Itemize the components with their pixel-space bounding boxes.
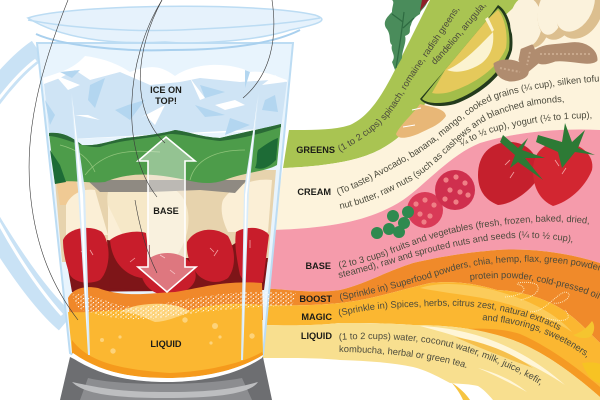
icon: banana slices (510, 0, 600, 48)
highlight: magic band lower orange edge (465, 329, 600, 397)
panel: liquid band (262, 323, 600, 400)
greens text: GREENS (296, 145, 335, 155)
magic text: MAGIC (301, 312, 332, 322)
blender glass jar (37, 43, 293, 380)
blender handle (0, 50, 66, 322)
icon: nut butter dollop (396, 104, 446, 138)
boost text: BOOST (299, 294, 332, 304)
icon: leafy green (385, 0, 429, 70)
cream text: nut butter, raw nuts (such as cashews and blanched almonds, (340, 96, 564, 209)
liquid text: (1 to 2 cups) water, coconut water, milk, juice, kefir, (339, 332, 542, 386)
icon: lemon wedge (573, 321, 600, 383)
banana layer (54, 165, 276, 262)
base text: (2 to 3 cups) fruits and vegetables (fresh, frozen, baked, dried, (339, 214, 589, 270)
icon: peas (371, 206, 414, 239)
greens text: dandelion, arugula, (432, 5, 486, 64)
panel: magic band (262, 282, 600, 397)
liquid text: kombucha, herbal or green tea. (340, 345, 466, 368)
icon: walnuts (495, 44, 596, 80)
base text: BASE (305, 261, 331, 271)
leader lines (29, 0, 274, 320)
glass highlights (71, 92, 259, 360)
panel: cream band (272, 0, 600, 230)
label: base: BASE (153, 206, 179, 216)
greens text: (1 to 2 cups) spinach, romaine, radish greens, (338, 9, 460, 153)
panel: greens band (283, 0, 522, 168)
double arrow (138, 137, 196, 292)
icon: avocado (420, 5, 512, 106)
strawberry layer (63, 228, 269, 296)
highlight: magic band upper glow (420, 284, 572, 332)
cream text: ¼ to ½ cup), yogurt (½ to 1 cup), (459, 111, 592, 146)
spinach layer (49, 124, 281, 184)
icon: raspberries (407, 170, 475, 228)
icon: farm strawberries (478, 123, 595, 206)
liquid bottom shading (72, 340, 263, 378)
boost text: (Sprinkle in) Superfood powders, chia, hemp, flax, green powder, (340, 255, 600, 302)
blender base (60, 353, 272, 400)
liquid layer (68, 304, 263, 378)
greens text (296, 5, 486, 155)
magic text: (Sprinkle in) Spices, herbs, citrus zest, natural extracts (338, 299, 560, 330)
panel: boost band (262, 250, 600, 343)
swirl: liquid streaks (420, 326, 565, 400)
liquid bubbles (100, 317, 255, 354)
magic text (301, 299, 587, 358)
liquid text: LIQUID (301, 331, 332, 341)
panel: base band (262, 130, 600, 291)
ice layer (43, 56, 287, 140)
cream text: CREAM (297, 187, 331, 197)
label: liquid in jar: LIQUID (150, 339, 182, 349)
blender rim (28, 6, 322, 50)
pale dollop in liquid (120, 304, 190, 322)
label: ice on top: ICE ON (150, 85, 182, 95)
orange layer (68, 282, 263, 320)
boost sprinkles (505, 282, 569, 320)
cream text: (To taste) Avocado, banana, mango, cooked grains (¼ cup), silken tofu, (337, 75, 599, 196)
magic text: and flavorings, sweeteners, (482, 314, 587, 358)
base text: steamed), raw and sprouted nuts and seeds (¼ to ½ cup), (338, 231, 572, 278)
sprinkle band (72, 292, 296, 319)
label: ice on top: TOP! (155, 96, 177, 106)
